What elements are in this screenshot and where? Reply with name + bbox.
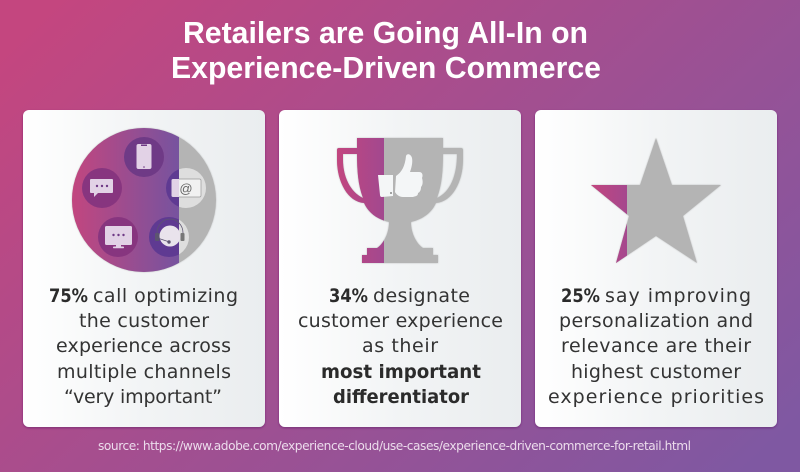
text: 25 percent: 25% bbox=[561, 285, 600, 307]
text: 75 percent: the customer bbox=[79, 310, 209, 332]
text: 25 percent: relevance are their bbox=[561, 335, 751, 357]
text: 75 percent bbox=[49, 285, 238, 408]
text: 75 percent: call optimizing bbox=[93, 285, 238, 307]
icon: headset bbox=[149, 217, 189, 257]
text: 34 percent: differentiator bbox=[333, 386, 470, 408]
card background bbox=[535, 110, 777, 427]
icon: star bbox=[591, 138, 721, 263]
card background bbox=[23, 110, 265, 427]
text: 25 percent: say improving bbox=[605, 285, 751, 307]
panel: differentiator bbox=[279, 110, 521, 427]
panel: multiple channels bbox=[23, 110, 265, 427]
text: 25 percent: highest customer bbox=[571, 361, 741, 383]
text: 34 percent: designate bbox=[373, 285, 470, 307]
text: 25 percent: personalization and bbox=[559, 310, 753, 332]
icon: monitor bbox=[98, 217, 138, 257]
panel: personalization bbox=[535, 110, 777, 427]
text: 34 percent: 34% bbox=[329, 285, 368, 307]
text: 34 percent: most important bbox=[321, 361, 481, 383]
icon: phone bbox=[124, 137, 164, 177]
text: 25 percent: experience priorities bbox=[548, 386, 764, 408]
card background bbox=[279, 110, 521, 427]
text: 34 percent: as their bbox=[362, 335, 438, 357]
text: 75 percent: 75% bbox=[49, 285, 88, 307]
title: Retailers are Going All-In on bbox=[183, 15, 588, 50]
title bbox=[171, 15, 601, 85]
icon: channel circle bbox=[72, 128, 216, 272]
text: 75 percent: “very important” bbox=[64, 386, 222, 408]
text: 75 percent: multiple channels bbox=[57, 361, 231, 383]
icon: thumbs up bbox=[378, 154, 423, 197]
title: Experience-Driven Commerce bbox=[171, 50, 601, 85]
icon: email bbox=[166, 168, 206, 208]
text: 34 percent: customer experience bbox=[298, 310, 503, 332]
source line: source: https://www.adobe.com/experience-cloud/use-cases/experience-driven-commerce-for-retail.html bbox=[98, 439, 691, 453]
text: 25 percent bbox=[548, 285, 764, 408]
icon: trophy bbox=[337, 138, 463, 263]
text: 34 percent bbox=[298, 285, 503, 408]
icon: email: @ bbox=[179, 181, 193, 196]
icon: chat bubble bbox=[82, 168, 122, 208]
text: 75 percent: experience across bbox=[56, 335, 231, 357]
